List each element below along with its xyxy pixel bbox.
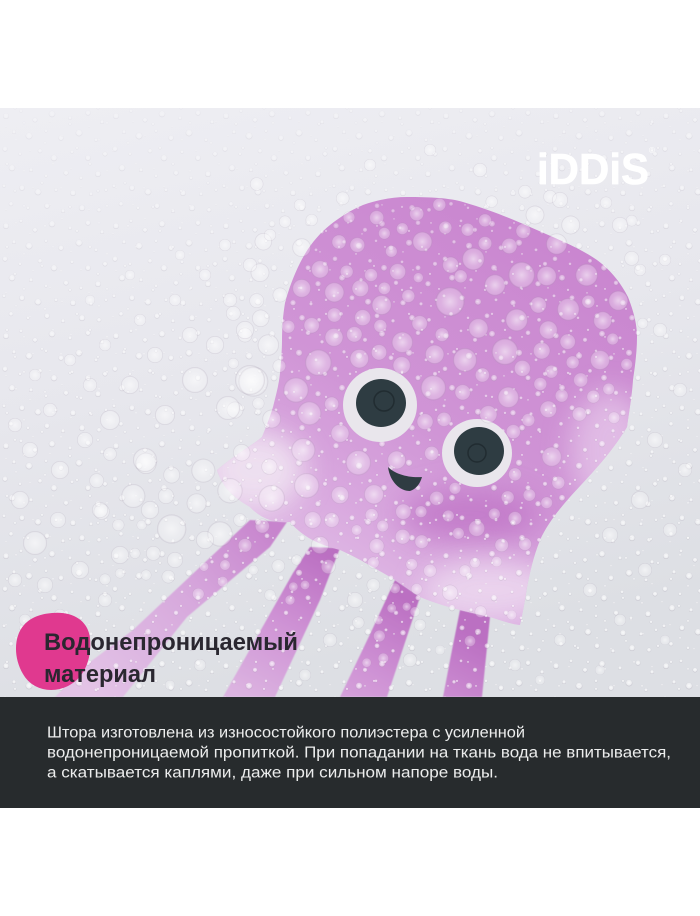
droplets over the lower body and tentacles (89, 438, 565, 667)
left eye (343, 368, 417, 442)
jellyfish eyes and smile (343, 368, 512, 491)
tiny droplet texture (0, 108, 700, 697)
heading (44, 629, 298, 688)
right eye (442, 419, 512, 487)
iDDIS logo: iDDiS (537, 145, 649, 194)
fabric background (0, 108, 700, 697)
heading: Водонепроницаемый (44, 629, 298, 656)
description text (47, 724, 671, 782)
dark description band (0, 697, 700, 808)
photo panel: wet fabric with jellyfish (0, 108, 700, 697)
large droplets over the head (226, 177, 648, 443)
heading: материал (44, 661, 156, 688)
jellyfish body (200, 190, 650, 630)
droplets on the bare fabric, left and right (8, 144, 692, 690)
registered mark: ® (649, 146, 655, 155)
description text: Штора изготовлена из износостойкого полиэстера с усиленной (47, 724, 525, 742)
jellyfish tentacles (55, 520, 490, 697)
description text: водонепроницаемой пропиткой. При попадании на ткань вода не впитывается, (47, 744, 671, 762)
infographic canvas (0, 108, 700, 808)
description text: а скатывается каплями, даже при сильном напоре воды. (47, 764, 498, 782)
smile (388, 467, 422, 491)
pink accent blob (16, 613, 90, 690)
